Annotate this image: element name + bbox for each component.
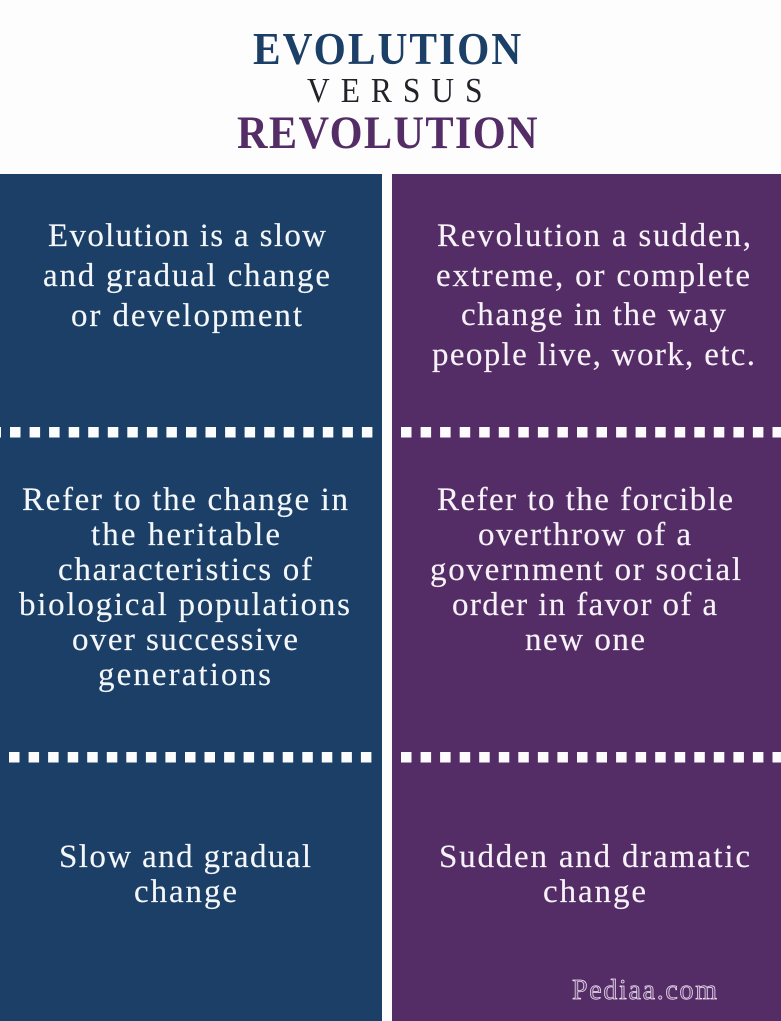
title (237, 24, 538, 159)
title: VERSUS (307, 72, 483, 110)
title: EVOLUTION (253, 24, 522, 75)
text: revolution meaning: overthrow of a (478, 517, 691, 553)
text: evolution meaning: over successive (72, 622, 298, 658)
text: evolution summary: Slow and gradual (59, 839, 311, 875)
text: evolution definition: and gradual change (43, 258, 330, 294)
text: revolution definition (432, 218, 755, 373)
text: revolution meaning: new one (525, 622, 645, 658)
text: revolution summary: change (543, 874, 646, 910)
divider: evolution upper (0, 427, 372, 438)
text: revolution definition: Revolution a sudden, (437, 218, 751, 254)
title: REVOLUTION (237, 106, 538, 159)
text: evolution summary: change (134, 874, 237, 910)
text: evolution meaning: biological populations (19, 587, 350, 623)
text: evolution meaning: the heritable (91, 517, 280, 553)
text: revolution summary (439, 839, 750, 910)
panel: evolution (0, 174, 382, 1021)
text: evolution definition (43, 218, 330, 334)
text: evolution meaning: generations (98, 657, 271, 693)
text: evolution meaning: Refer to the change in (22, 482, 348, 518)
logo: Pediaa.com: Pediaa.com (572, 975, 717, 1006)
text: evolution definition: Evolution is a slow (48, 218, 326, 254)
text: revolution definition: people live, work, etc. (432, 337, 755, 373)
text: revolution meaning: order in favor of a (452, 587, 717, 623)
text: revolution summary: Sudden and dramatic (439, 839, 750, 875)
text: evolution summary (59, 839, 311, 910)
text: revolution definition: change in the way (461, 297, 726, 333)
divider: evolution lower (9, 752, 371, 762)
text: revolution meaning: government or social (430, 552, 741, 588)
panel: revolution (392, 174, 781, 1021)
text: revolution meaning: Refer to the forcible (437, 482, 733, 518)
divider: revolution lower (401, 752, 781, 762)
text: revolution meaning (430, 482, 741, 658)
divider: revolution upper (401, 427, 781, 438)
text: evolution meaning (19, 482, 350, 693)
text: evolution meaning: characteristics of (58, 552, 312, 588)
text: revolution definition: extreme, or complete (436, 258, 750, 294)
text: evolution definition: or development (71, 298, 302, 334)
